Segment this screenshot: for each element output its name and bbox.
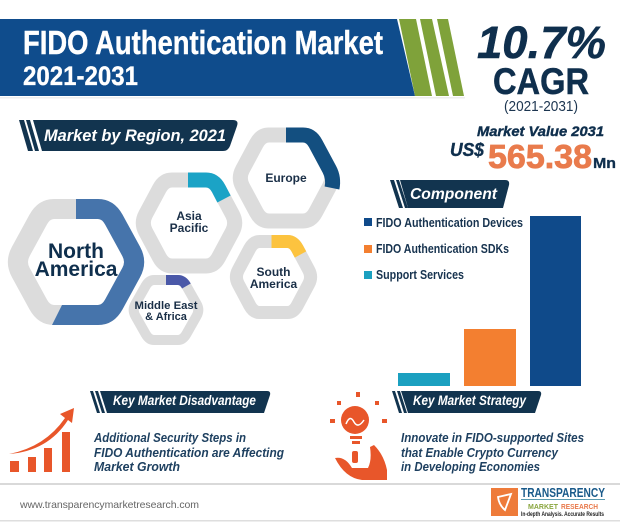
CAGR callout: CAGR	[493, 61, 589, 102]
legend: FIDO Authentication SDKs	[376, 241, 509, 256]
bar chart	[398, 216, 581, 386]
logo: RESEARCH	[561, 504, 598, 511]
hexagon: North America: North	[48, 240, 104, 263]
text: disadvantage: FIDO Authentication are Affecting	[94, 445, 284, 460]
title banner: 2021-2031	[23, 61, 138, 91]
hexagon: South America	[236, 242, 311, 312]
hexagon: Asia Pacific: Pacific	[170, 221, 209, 235]
text: disadvantage: Market Growth	[94, 459, 180, 474]
hexagon: Asia Pacific: Asia	[176, 209, 202, 223]
hexagon: Middle East and Africa	[134, 280, 198, 340]
market value callout: Market Value 2031	[477, 123, 604, 139]
text: strategy: Innovate in FIDO-supported Sites	[401, 430, 584, 445]
hexagon: South America: America	[250, 277, 298, 291]
legend: FIDO Authentication Devices	[376, 215, 523, 230]
hexagon: North America: America	[35, 258, 118, 281]
icon: growth chart	[9, 408, 74, 472]
logo: MARKET	[528, 504, 559, 511]
legend	[364, 215, 523, 282]
hexagon: Middle East and Africa: Middle East	[135, 300, 198, 312]
heading: component	[390, 180, 509, 208]
hexagon: South America: South	[256, 265, 290, 279]
title banner: FIDO Authentication Market	[23, 24, 383, 61]
hexagon: North America	[18, 209, 134, 325]
icon: light bulb in hand	[330, 392, 387, 480]
logo: In-depth Analysis. Accurate Results	[521, 512, 605, 518]
CAGR callout	[477, 17, 606, 115]
heading: key market disadvantage: Key Market Disadvantage	[113, 393, 256, 408]
logo	[491, 485, 605, 518]
heading: key market disadvantage	[90, 391, 270, 413]
hexagon: Europe: Europe	[265, 171, 307, 185]
hexagon: Middle East and Africa: & Africa	[145, 311, 188, 323]
market value callout: Mn	[593, 155, 616, 172]
CAGR callout: (2021-2031)	[504, 98, 578, 115]
heading: key market strategy: Key Market Strategy	[413, 393, 527, 408]
heading: component: Component	[410, 186, 498, 203]
text: strategy: that Enable Crypto Currency	[401, 445, 559, 460]
market value callout: US$	[450, 140, 485, 160]
text: disadvantage: Additional Security Steps in	[93, 430, 246, 445]
heading: market by region	[19, 120, 238, 151]
text: disadvantage	[93, 430, 284, 474]
title banner	[0, 19, 465, 98]
market value callout	[450, 123, 616, 175]
legend: Support Services	[376, 267, 464, 282]
hexagon: Asia Pacific	[143, 180, 235, 266]
heading: market by region: Market by Region, 2021	[44, 126, 226, 145]
text: strategy	[401, 430, 584, 474]
heading: key market strategy	[392, 391, 541, 413]
website url: www.transparencymarketresearch.com	[19, 499, 199, 511]
CAGR callout: 10.7%	[477, 17, 606, 68]
market value callout: 565.38	[488, 138, 592, 175]
text: strategy: in Developing Economies	[401, 459, 540, 474]
hexagon: Europe	[240, 135, 333, 221]
